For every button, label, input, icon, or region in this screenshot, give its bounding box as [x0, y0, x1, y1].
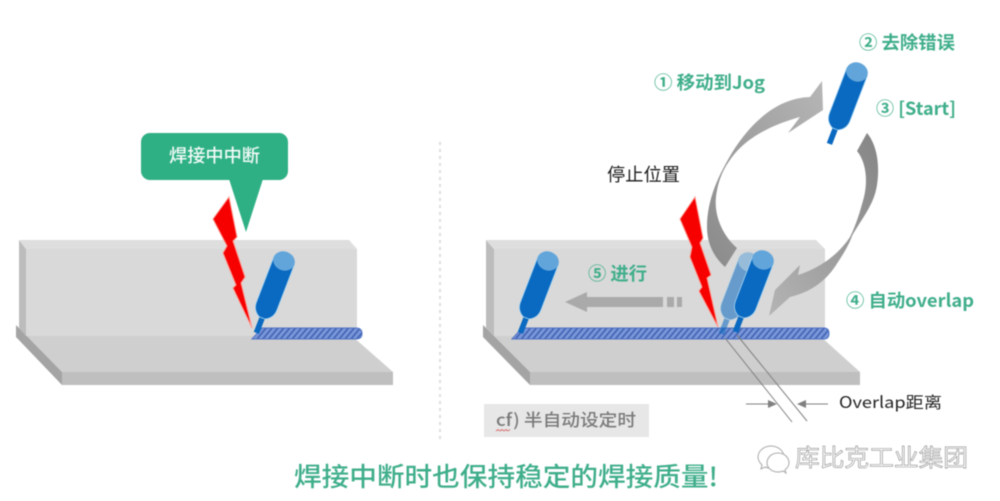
label: stop position: 停止位置	[607, 161, 680, 187]
arrow: automatic overlap return	[769, 133, 878, 316]
panel: left weld scene	[16, 133, 393, 385]
welding torch after advancing	[510, 248, 562, 337]
label: step 3: ③ [Start]	[876, 95, 956, 121]
icon: WeChat logo	[758, 446, 789, 473]
note: semi-automatic setting: cf) 半自动设定时	[496, 406, 636, 431]
divider	[439, 142, 441, 442]
callout: welding interrupted: 焊接中中断	[169, 142, 260, 168]
right weld bead	[512, 328, 829, 339]
label: step 4: ④ 自动overlap	[846, 287, 974, 313]
left red lightning bolt	[213, 197, 252, 328]
label: step 2: ② 去除错误	[859, 29, 955, 55]
raised torch	[819, 59, 871, 148]
note: semi-automatic setting	[484, 404, 649, 437]
right red lightning bolt	[680, 197, 718, 327]
overlap distance guide lines	[725, 335, 807, 422]
left weld bead	[252, 328, 362, 339]
bottom headline: 焊接中断时也保持稳定的焊接质量!	[294, 457, 718, 494]
watermark	[758, 438, 968, 473]
watermark text: 库比克工业集团	[795, 438, 968, 473]
left workpiece	[16, 240, 393, 385]
arrow: move to jog	[707, 81, 823, 267]
ghost torch at overlap start	[711, 249, 763, 338]
left welding torch	[246, 248, 298, 337]
label: step 1: ① 移动到Jog	[654, 69, 765, 95]
label: step 5: ⑤ 进行	[588, 260, 647, 286]
callout: welding interrupted	[141, 133, 288, 232]
right workpiece	[483, 240, 860, 385]
torch at stop position	[725, 247, 777, 336]
panel: right weld scene	[483, 29, 974, 437]
arrow: moving forward	[565, 292, 682, 312]
overlap distance dimension	[746, 389, 942, 413]
overlap distance dimension: Overlap距离	[839, 389, 942, 413]
